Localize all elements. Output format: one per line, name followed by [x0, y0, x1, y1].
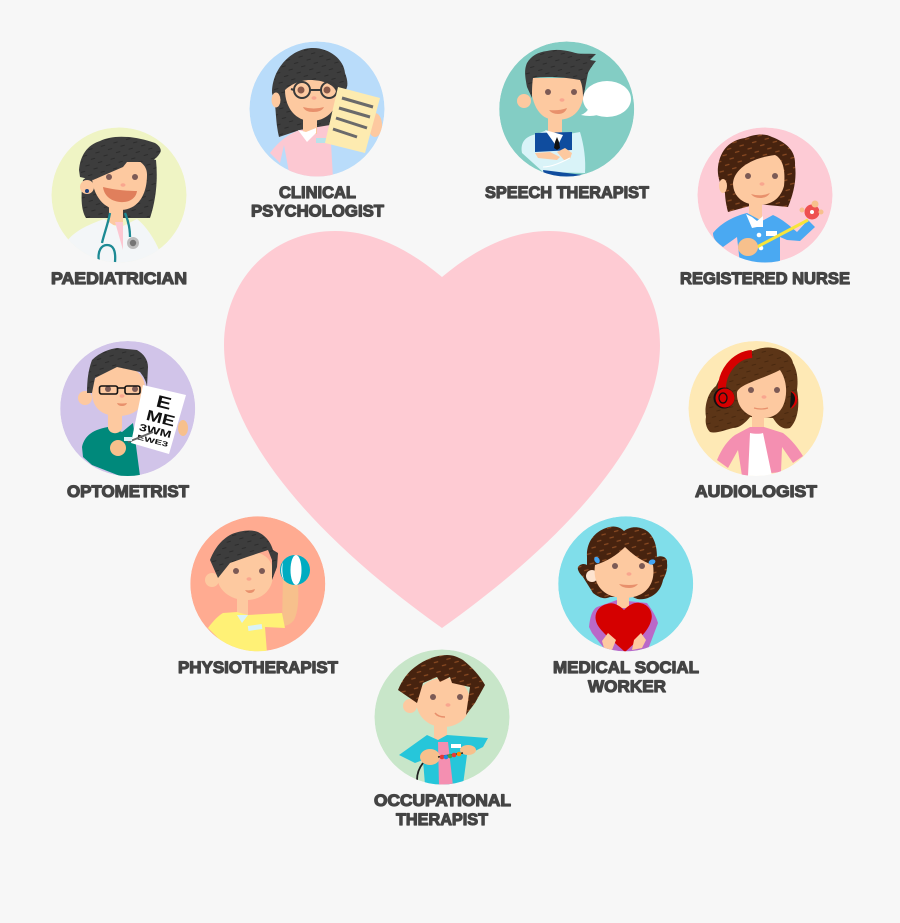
label: occupational therapist — [374, 791, 511, 829]
label: medical social worker — [553, 658, 699, 696]
label: paediatrician: PAEDIATRICIAN — [51, 269, 187, 288]
icon: occupational therapist portrait — [374, 650, 510, 786]
label: audiologist: AUDIOLOGIST — [695, 482, 818, 501]
label: medical social worker: MEDICAL SOCIAL — [553, 658, 699, 677]
icon: medical social worker portrait — [558, 516, 693, 652]
panel: audiologist — [688, 341, 824, 501]
label: clinical psychologist: CLINICAL — [279, 183, 356, 202]
panel: paediatrician — [51, 128, 187, 288]
label: clinical psychologist: PSYCHOLOGIST — [251, 202, 385, 220]
label: optometrist: OPTOMETRIST — [67, 482, 190, 501]
panel: speech therapist — [485, 42, 650, 202]
icon: beach ball — [280, 555, 310, 585]
label: medical social worker: WORKER — [588, 677, 666, 696]
label: occupational therapist: THERAPIST — [396, 810, 489, 829]
icon: registered nurse portrait — [698, 128, 832, 264]
panel: occupational therapist — [374, 650, 511, 829]
icon: audiologist portrait — [688, 341, 824, 476]
label: physiotherapist: PHYSIOTHERAPIST — [178, 658, 339, 677]
icon: physiotherapist portrait — [190, 516, 325, 653]
label: speech therapist: SPEECH THERAPIST — [485, 183, 650, 202]
icon: paediatrician portrait — [52, 128, 186, 270]
panel: clinical psychologist — [250, 42, 385, 220]
central heart — [224, 231, 660, 628]
icon: optometrist portrait: E — [154, 392, 173, 414]
icon: optometrist portrait: ME — [144, 407, 177, 431]
icon: optometrist portrait: 3WM — [138, 422, 172, 441]
panel: medical social worker — [553, 516, 699, 696]
panel: registered nurse — [680, 128, 850, 288]
panel: optometrist — [60, 341, 195, 501]
label: clinical psychologist — [251, 183, 385, 220]
icon: clinical psychologist portrait — [250, 42, 384, 178]
panel: physiotherapist — [178, 516, 339, 677]
icon: speech therapist portrait — [499, 42, 634, 180]
icon: optometrist portrait: EWE3 — [136, 434, 169, 449]
label: occupational therapist: OCCUPATIONAL — [374, 791, 511, 810]
label: registered nurse: REGISTERED NURSE — [680, 269, 850, 288]
icon: optometrist portrait — [60, 341, 195, 476]
